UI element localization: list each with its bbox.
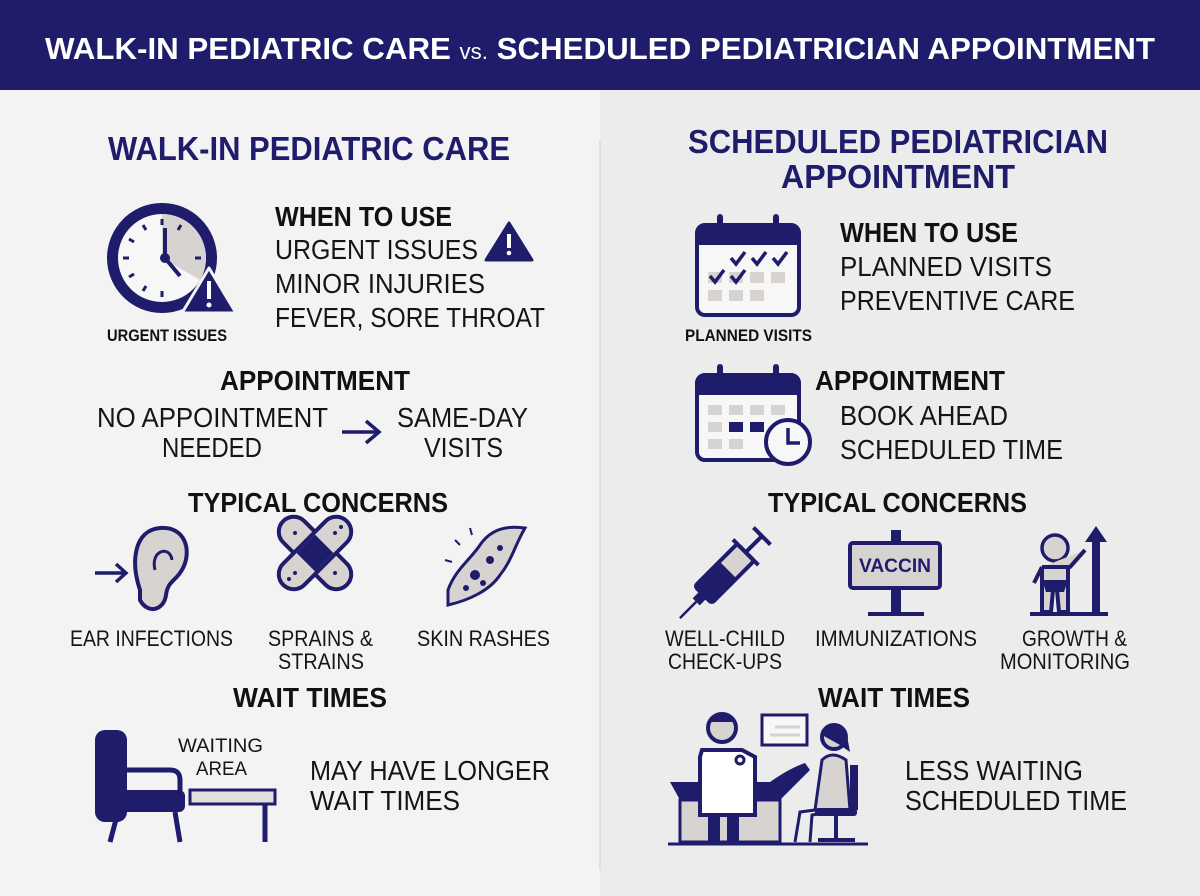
wait text: LESS WAITING bbox=[905, 755, 1083, 786]
when to use block: FEVER, SORE THROAT bbox=[275, 302, 545, 333]
wait times heading: WAIT TIMES bbox=[818, 682, 970, 713]
when to use block: URGENT ISSUES bbox=[275, 234, 478, 265]
icon: calendar with checks bbox=[697, 214, 799, 315]
concern labels: GROWTH & bbox=[1022, 626, 1127, 651]
concern labels: WELL-CHILD bbox=[665, 626, 785, 651]
when to use block: WHEN TO USE bbox=[275, 201, 452, 232]
appointment block bbox=[815, 365, 1063, 465]
icon: waiting chair bbox=[95, 730, 275, 842]
left panel: walk-in care bbox=[70, 130, 550, 842]
wait text: SCHEDULED TIME bbox=[905, 785, 1127, 816]
left title: WALK-IN PEDIATRIC CARE bbox=[108, 130, 510, 167]
typical concerns heading: TYPICAL CONCERNS bbox=[188, 487, 448, 518]
icon: vaccine sign bbox=[850, 530, 940, 615]
typical concerns heading: TYPICAL CONCERNS bbox=[768, 487, 1027, 518]
icon: waiting chair: WAITING bbox=[178, 736, 263, 757]
right title bbox=[688, 123, 1108, 195]
icon: warning bbox=[486, 223, 532, 260]
appointment block bbox=[97, 365, 528, 463]
wait text bbox=[310, 755, 550, 816]
header banner bbox=[0, 0, 1200, 90]
concern labels: EAR INFECTIONS bbox=[70, 626, 233, 651]
concern labels bbox=[70, 626, 550, 674]
appointment block: APPOINTMENT bbox=[815, 365, 1005, 396]
when to use block: PREVENTIVE CARE bbox=[840, 285, 1075, 316]
label: urgent issues: URGENT ISSUES bbox=[107, 326, 227, 345]
when to use block bbox=[840, 217, 1075, 316]
appointment block: VISITS bbox=[424, 432, 503, 463]
icon: child growth bbox=[1030, 526, 1108, 614]
concern labels: SPRAINS & bbox=[268, 626, 373, 651]
when to use block: PLANNED VISITS bbox=[840, 251, 1052, 282]
appointment block: SAME-DAY bbox=[397, 402, 528, 433]
header banner: WALK-IN PEDIATRIC CARE vs. SCHEDULED PEDIATRICIAN APPOINTMENT bbox=[45, 31, 1155, 66]
concern labels: MONITORING bbox=[1000, 649, 1130, 674]
right title: APPOINTMENT bbox=[781, 158, 1015, 195]
concern labels: CHECK-UPS bbox=[668, 649, 782, 674]
wait text: WAIT TIMES bbox=[310, 785, 460, 816]
icon: ear bbox=[95, 528, 187, 609]
icon: syringe bbox=[667, 523, 775, 631]
appointment block: BOOK AHEAD bbox=[840, 400, 1008, 431]
icon: waiting chair: AREA bbox=[196, 759, 247, 780]
label: planned visits: PLANNED VISITS bbox=[685, 326, 812, 345]
icon: bandage bbox=[273, 511, 357, 595]
when to use block: WHEN TO USE bbox=[840, 217, 1018, 248]
when to use block: MINOR INJURIES bbox=[275, 268, 485, 299]
wait text bbox=[905, 755, 1127, 816]
arrow bbox=[342, 421, 379, 443]
appointment block: APPOINTMENT bbox=[220, 365, 410, 396]
right title: SCHEDULED PEDIATRICIAN bbox=[688, 123, 1108, 160]
wait text: MAY HAVE LONGER bbox=[310, 755, 550, 786]
wait times heading: WAIT TIMES bbox=[233, 682, 387, 713]
appointment block: SCHEDULED TIME bbox=[840, 434, 1063, 465]
icon: calendar with clock bbox=[697, 364, 810, 464]
icon: skin rash bbox=[445, 527, 525, 605]
icon: vaccine sign: VACCIN bbox=[859, 556, 931, 577]
right panel: scheduled appointment bbox=[665, 123, 1130, 844]
concern labels: STRAINS bbox=[278, 649, 364, 674]
appointment block: NEEDED bbox=[162, 432, 262, 463]
when to use block bbox=[275, 201, 545, 333]
concern labels bbox=[665, 626, 1130, 674]
icon: doctor and patient bbox=[668, 714, 868, 844]
appointment block: NO APPOINTMENT bbox=[97, 402, 328, 433]
concern labels: IMMUNIZATIONS bbox=[815, 626, 977, 651]
icon: clock with warning bbox=[107, 203, 236, 313]
concern labels: SKIN RASHES bbox=[417, 626, 550, 651]
